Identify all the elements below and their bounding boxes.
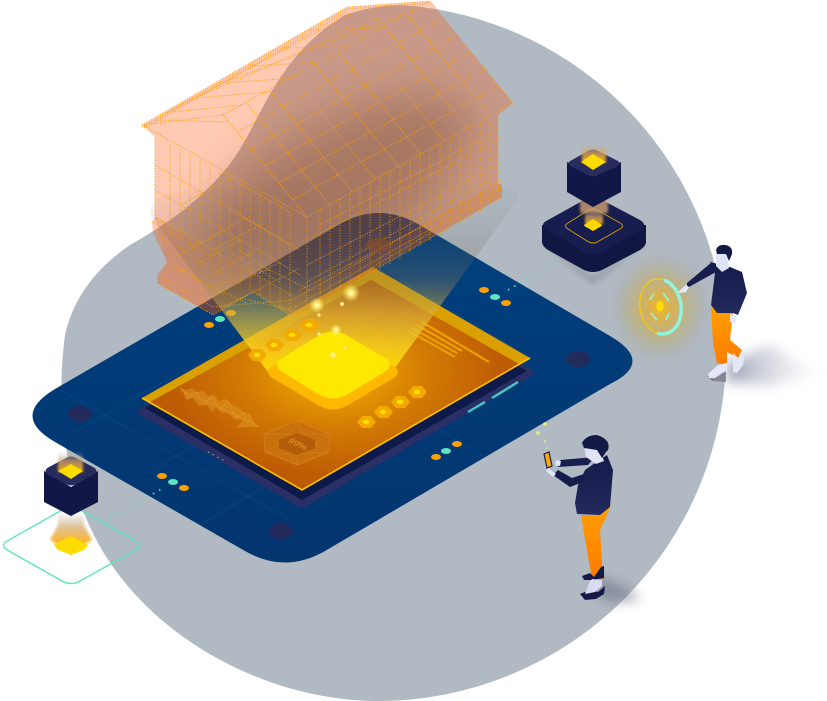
indicator lights [157, 287, 511, 491]
woman face [584, 446, 604, 464]
teal status bars [468, 382, 518, 412]
tablet base [141, 280, 531, 505]
teal outline pad [4, 508, 140, 584]
hexagon icons row right [357, 386, 427, 428]
sparks [309, 284, 360, 360]
man figure [678, 245, 822, 385]
tablet screen [142, 267, 530, 490]
roof wireframe [142, 1, 513, 217]
right wall wireframe [293, 115, 502, 317]
man hand [678, 285, 689, 293]
man shadow [727, 345, 822, 385]
man torso [710, 262, 747, 315]
house shading [155, 60, 502, 317]
house plinth glow [294, 269, 372, 314]
floating cube [567, 162, 621, 207]
woman torso [575, 455, 613, 515]
house body [142, 1, 513, 317]
sensor cube: bottom left [4, 452, 140, 584]
screen text lines [407, 322, 489, 362]
woman figure [536, 422, 640, 602]
man head [716, 252, 729, 272]
waveform chart [180, 388, 260, 428]
tablet port dots [208, 452, 225, 461]
dark chimney knot [366, 238, 390, 252]
phone [544, 452, 552, 468]
connection dots [110, 260, 558, 519]
light cone [151, 177, 518, 405]
circuit board platform [32, 213, 632, 562]
woman hands [546, 460, 561, 477]
cube beam [50, 512, 92, 545]
central chip [268, 332, 398, 410]
woman lower arm [553, 470, 587, 487]
woman shoes [580, 566, 605, 600]
background blob [61, 5, 726, 701]
man hair [716, 245, 732, 261]
wireframe house [142, 1, 513, 317]
hologram ring [608, 249, 712, 365]
woman hair [582, 435, 609, 458]
floating cube [44, 471, 98, 516]
sensor cube: top right [535, 143, 650, 285]
cube base [535, 198, 650, 285]
hexagon gauge: 99% [286, 437, 310, 451]
cube beam [580, 200, 608, 213]
board chip right [566, 350, 590, 368]
board chip bottom [268, 522, 294, 540]
woman shadow [595, 575, 640, 602]
man arm [687, 262, 716, 288]
man hand lower [730, 314, 737, 323]
man legs [711, 307, 742, 365]
hexagon icons row left [248, 319, 319, 361]
woman upper arm [558, 457, 595, 467]
board chip left [68, 406, 92, 422]
man shoes [708, 351, 745, 378]
woman legs [581, 503, 611, 579]
hexagon gauge [264, 421, 330, 465]
phone sparkles [536, 422, 548, 449]
left wall wireframe [152, 137, 310, 317]
